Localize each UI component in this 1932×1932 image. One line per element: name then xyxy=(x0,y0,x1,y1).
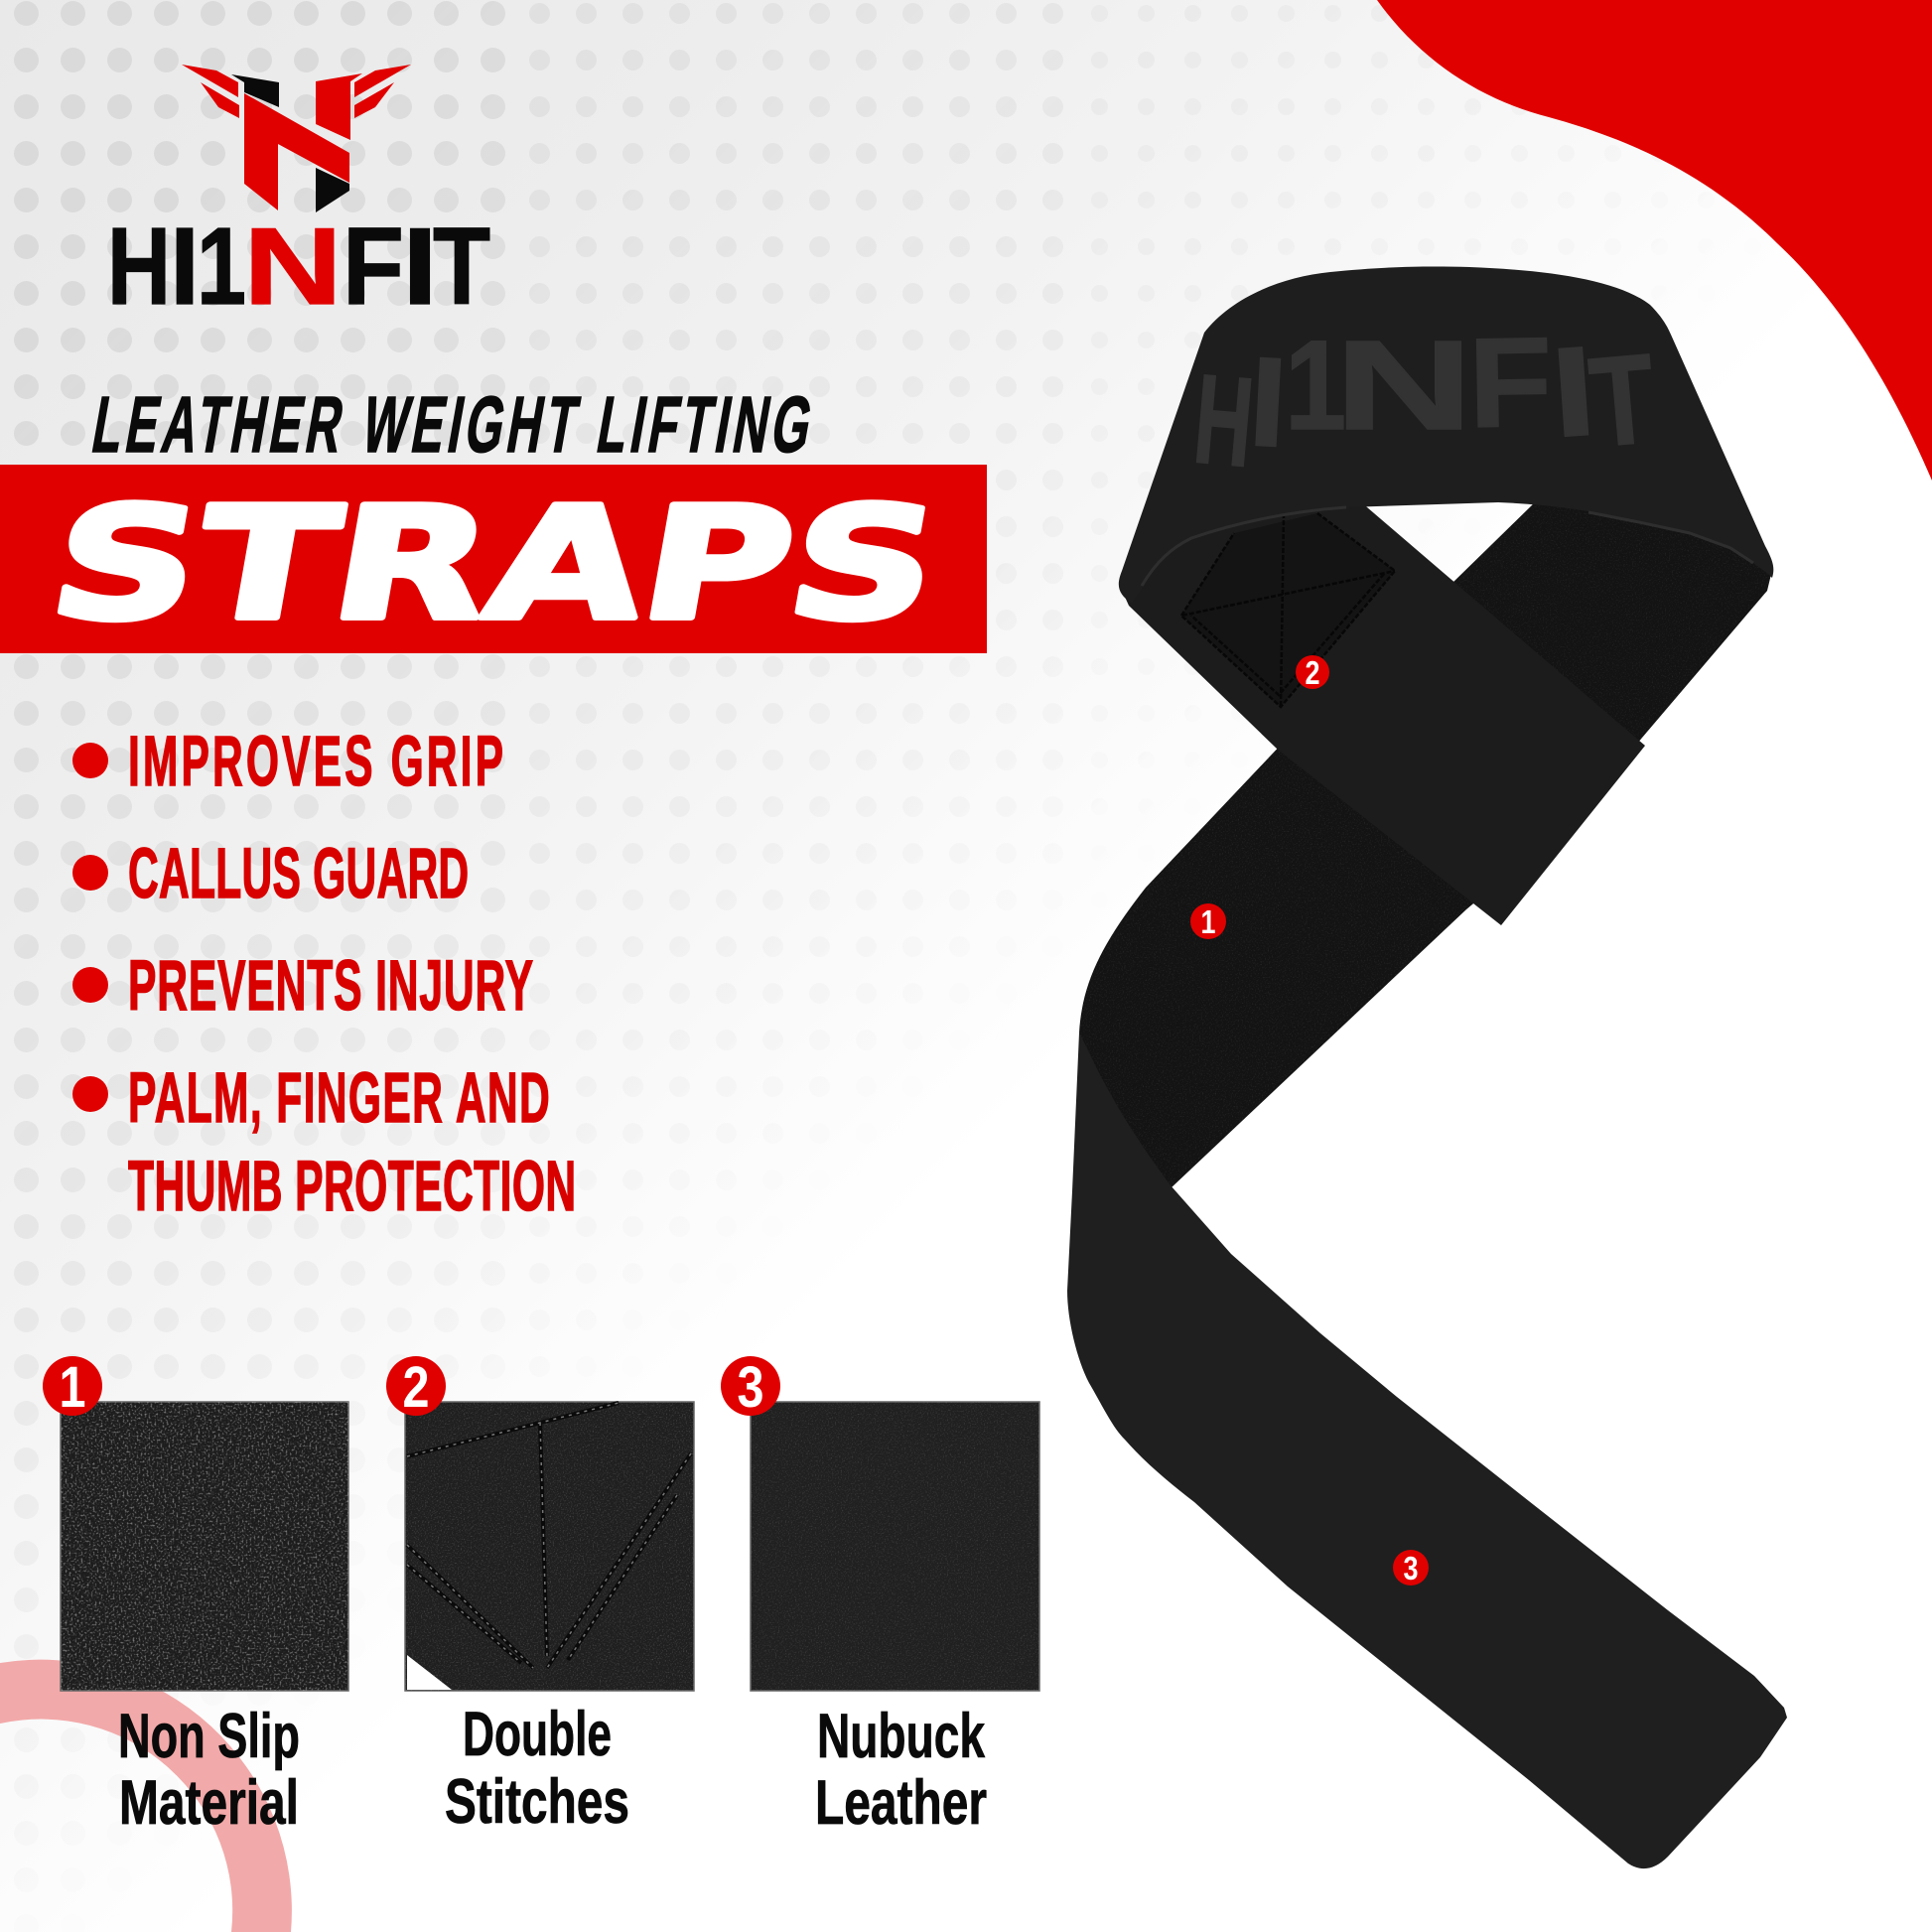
callout marker 3: 3 xyxy=(1404,1550,1418,1587)
number badge 3 xyxy=(721,1355,780,1420)
strap: lower suede section xyxy=(1079,749,1473,1187)
label 2: Double xyxy=(463,1700,612,1769)
texture swatch 3 xyxy=(751,1402,1039,1691)
number badge 2: 2 xyxy=(403,1355,429,1420)
dot pattern xyxy=(14,1,1063,1566)
strap: back inner suede xyxy=(1453,504,1771,741)
lifting strap product xyxy=(1067,267,1787,1868)
logo wordmark: I xyxy=(402,206,438,328)
logo wordmark: F xyxy=(343,206,404,328)
bullet: palm, finger and thumb protection: PALM, FINGER AND xyxy=(128,1059,550,1138)
bullet: palm, finger and thumb protection: THUMB PROTECTION xyxy=(128,1148,576,1226)
logo wordmark: H xyxy=(107,206,171,328)
strap: embossed band logo: N xyxy=(1334,315,1473,457)
callout marker 3 xyxy=(1393,1550,1429,1587)
strap: rim highlight xyxy=(1142,507,1753,586)
logo wordmark xyxy=(107,206,490,328)
detail 2: double stitches xyxy=(386,1355,694,1837)
callout marker 1 xyxy=(1190,903,1226,940)
bullet: prevents injury: PREVENTS INJURY xyxy=(128,947,533,1026)
number badge 1 xyxy=(43,1355,102,1420)
texture swatch 2 xyxy=(405,1402,694,1691)
strap: folded flap and lining xyxy=(1120,501,1645,925)
logo emblem xyxy=(182,65,411,212)
number badge 3: 3 xyxy=(737,1355,764,1420)
strap: stitched panel xyxy=(1181,513,1395,707)
red corner shape xyxy=(1377,0,1932,481)
strap: long nubuck tail xyxy=(1067,1033,1787,1868)
subtitle: LEATHER WEIGHT LIFTING xyxy=(86,381,818,470)
logo wordmark: 1 xyxy=(197,206,246,328)
strap: embossed band logo xyxy=(1189,312,1660,494)
detail 1: non slip material xyxy=(43,1355,348,1838)
logo wordmark: T xyxy=(433,206,490,328)
label 2: Stitches xyxy=(445,1767,629,1837)
red title band xyxy=(0,465,987,653)
label 3: Leather xyxy=(815,1768,987,1838)
bullet: callus guard: CALLUS GUARD xyxy=(128,835,469,913)
callout marker 2: 2 xyxy=(1305,654,1320,691)
label 3: Nubuck xyxy=(817,1702,986,1771)
strap: embossed band logo: H xyxy=(1189,347,1259,494)
texture swatch 1 xyxy=(61,1402,348,1691)
strap: embossed band logo: I xyxy=(1547,320,1600,465)
logo wordmark: N xyxy=(243,206,343,328)
bullet: palm, finger and thumb protection xyxy=(72,1059,576,1226)
feature list xyxy=(72,723,576,1226)
label 1 xyxy=(118,1702,300,1838)
logo xyxy=(107,65,490,328)
label 1: Non Slip xyxy=(118,1702,300,1771)
title: straps: STRAPS xyxy=(38,475,951,655)
strap: embossed band logo: I xyxy=(1246,331,1291,475)
callout marker 2 xyxy=(1296,654,1329,691)
callout marker 1: 1 xyxy=(1201,903,1215,940)
logo wordmark: I xyxy=(170,206,200,328)
label 3 xyxy=(815,1702,987,1838)
label 1: Material xyxy=(119,1768,299,1838)
label 2 xyxy=(445,1700,629,1837)
strap: top loop band xyxy=(1119,267,1773,604)
bullet: improves grip: IMPROVES GRIP xyxy=(128,723,503,801)
number badge 1: 1 xyxy=(60,1355,85,1420)
strap: embossed band logo: F xyxy=(1467,312,1553,455)
pink arc xyxy=(0,1660,292,1932)
number badge 2 xyxy=(386,1355,446,1420)
detail 3: nubuck leather xyxy=(721,1355,1039,1838)
strap: embossed band logo: T xyxy=(1585,328,1660,475)
strap: embossed band logo: 1 xyxy=(1285,315,1346,457)
